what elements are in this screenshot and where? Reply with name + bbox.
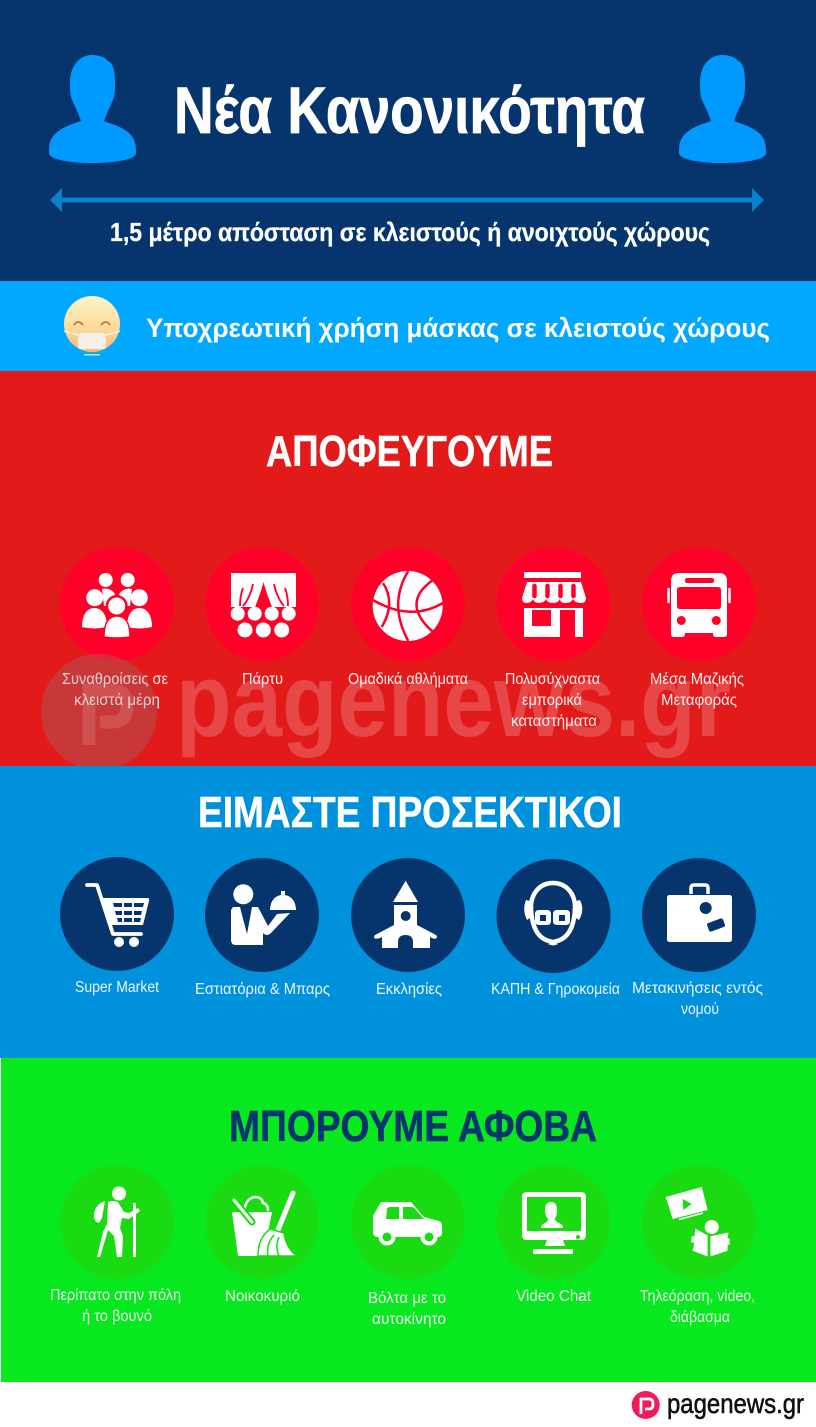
label: shopping stores: Πολυσύχναστα — [505, 671, 600, 688]
label: tv video reading: διάβασμα — [670, 1309, 730, 1326]
item: video chat — [496, 1165, 610, 1279]
subtitle: 1,5 μέτρο απόσταση σε κλειστούς ή ανοιχτούς χώρους — [110, 217, 710, 247]
label: tv video reading: Τηλεόραση, video, — [640, 1288, 755, 1305]
watermark: pagenews.gr — [176, 643, 731, 759]
item: party — [205, 547, 319, 661]
label: walking: Περίπατο στην πόλη — [50, 1287, 181, 1304]
label: tv video reading — [640, 1288, 755, 1326]
label: shopping stores — [505, 671, 600, 730]
label: super market: Super Market — [75, 979, 160, 996]
label: travel within prefecture: νομού — [681, 1001, 719, 1018]
item: super market — [60, 857, 174, 971]
icon: face with mask — [64, 296, 120, 356]
item: churches — [351, 858, 465, 972]
label: travel within prefecture — [632, 980, 763, 1018]
label: housework: Νοικοκυριό — [225, 1288, 300, 1305]
label: travel within prefecture: Μετακινήσεις εντός — [632, 980, 763, 997]
label: car ride: Βόλτα με το — [368, 1290, 446, 1307]
item: shopping stores — [496, 547, 610, 661]
panel: avoid — [0, 371, 816, 770]
item: elderly care — [496, 859, 610, 973]
label: party: Πάρτυ — [242, 671, 283, 688]
panel: can do — [1, 1058, 816, 1382]
label: team sports: Ομαδικά αθλήματα — [348, 671, 468, 688]
label: restaurants and bars: Εστιατόρια & Μπαρς — [195, 981, 330, 998]
label: walking — [50, 1287, 181, 1325]
label: public transport: Μεταφοράς — [661, 692, 737, 709]
item: tv video reading — [642, 1165, 756, 1279]
item: car ride — [351, 1165, 465, 1279]
label: public transport — [650, 671, 744, 709]
label: shopping stores: εμπορικά — [522, 692, 582, 709]
item: walking — [60, 1165, 174, 1279]
label: video chat: Video Chat — [516, 1288, 592, 1305]
label: car ride: αυτοκίνητο — [372, 1311, 446, 1328]
title: Νέα Κανονικότητα — [174, 73, 645, 147]
label: churches: Εκκλησίες — [376, 981, 442, 998]
item: gatherings — [60, 547, 174, 661]
icon: right person — [679, 55, 766, 163]
label: gatherings: Συναθροίσεις σε — [62, 671, 168, 688]
item: travel within prefecture — [642, 858, 756, 972]
label: public transport: Μέσα Μαζικής — [650, 671, 744, 688]
label: elderly care: ΚΑΠΗ & Γηροκομεία — [491, 981, 620, 998]
panel: careful — [0, 766, 816, 1058]
heading: careful: ΕΙΜΑΣΤΕ ΠΡΟΣΕΚΤΙΚΟΙ — [198, 788, 622, 837]
watermark — [41, 643, 731, 770]
label: walking: ή το βουνό — [82, 1308, 152, 1325]
label: shopping stores: καταστήματα — [511, 713, 597, 730]
item: housework — [205, 1165, 319, 1279]
label: gatherings: κλειστά μέρη — [74, 692, 160, 709]
icon: left person — [49, 55, 136, 163]
arrow: distance — [50, 188, 764, 212]
panel: header — [0, 0, 816, 281]
label: car ride — [368, 1290, 446, 1328]
item: restaurants and bars — [205, 858, 319, 972]
item: public transport — [642, 547, 756, 661]
label: gatherings — [62, 671, 168, 709]
heading: can do: ΜΠΟΡΟΥΜΕ ΑΦΟΒΑ — [229, 1102, 597, 1151]
panel: mask band — [0, 281, 816, 371]
item: team sports — [351, 547, 465, 661]
mask notice text: Υποχρεωτική χρήση μάσκας σε κλειστούς χώρους — [146, 313, 770, 343]
heading: avoid: ΑΠΟΦΕΥΓΟΥΜΕ — [266, 427, 553, 476]
